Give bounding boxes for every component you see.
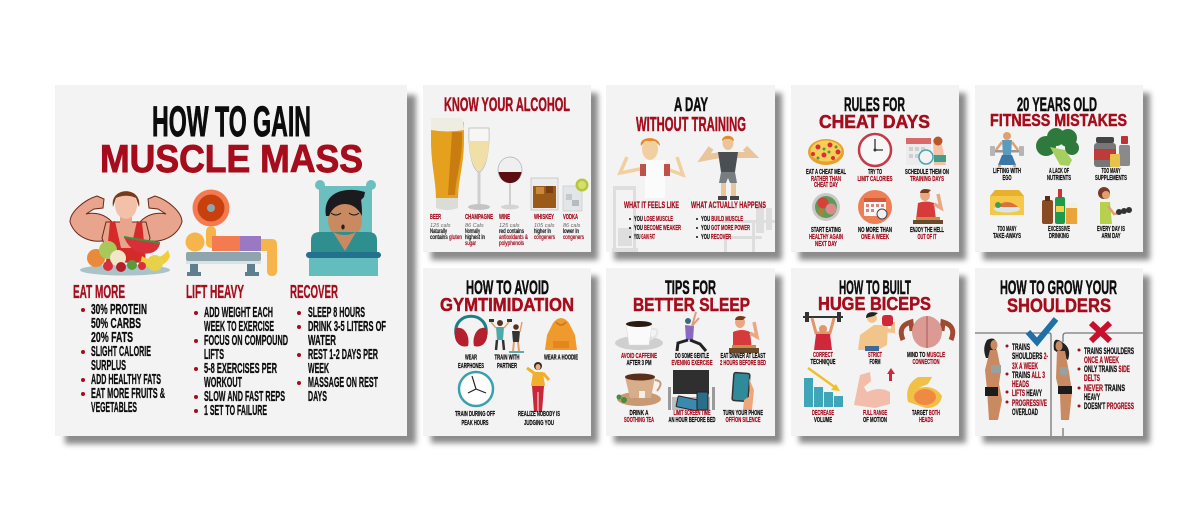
panel: how to gain muscle mass bbox=[55, 85, 407, 436]
column: what actually happens bbox=[691, 200, 766, 241]
list: bad habits: TRAINS SHOULDERS bbox=[1084, 346, 1134, 357]
labels: row two: PEAK HOURS bbox=[462, 420, 489, 427]
heading red: HUGE BICEPS bbox=[818, 293, 931, 314]
column: eat more: VEGETABLES bbox=[91, 400, 137, 416]
label: schedule them: TRAINING DAYS bbox=[910, 176, 944, 183]
label: try to limit calories bbox=[858, 169, 893, 183]
column: what actually happens: WHAT ACTUALLY HAPPENS bbox=[691, 200, 766, 211]
labels: alcohol types bbox=[430, 214, 585, 247]
panel: how to avoid gymtimidation bbox=[423, 268, 591, 436]
labels: alcohol types: Naturally bbox=[430, 228, 447, 235]
icon: brain with arms bbox=[901, 316, 953, 348]
list: good habits: OVERLOAD bbox=[1012, 407, 1038, 418]
icon: yoga bbox=[677, 312, 706, 351]
list: bad habits: HEAVY bbox=[1084, 392, 1100, 403]
column: what actually happens: YOU RECOVER bbox=[701, 232, 731, 241]
heading red: CHEAT DAYS bbox=[819, 111, 930, 132]
labels: row one bbox=[458, 354, 578, 370]
column: recover bbox=[290, 282, 386, 405]
column: lift heavy: LIFT HEAVY bbox=[186, 282, 244, 302]
heading: 20 YEARS OLD bbox=[1017, 94, 1097, 116]
column: recover: DRINK 3-5 LITERS OF bbox=[308, 319, 386, 335]
title: how to gain: HOW TO GAIN bbox=[152, 98, 311, 146]
column: what it feels like: YOU GAIN FAT bbox=[634, 232, 655, 241]
labels: row two: OFF/ON SILENCE bbox=[726, 417, 761, 424]
list: good habits: LIFTS HEAVY bbox=[1012, 388, 1042, 399]
panel: rules for cheat days bbox=[791, 85, 959, 252]
icon: decreasing volume chart bbox=[804, 368, 843, 407]
labels: alcohol types: congeners bbox=[563, 234, 585, 241]
column: recover: DAYS bbox=[308, 389, 327, 405]
labels: row one: TECHNIQUE bbox=[810, 359, 836, 366]
column: lift heavy: ADD WEIGHT EACH bbox=[204, 305, 273, 321]
column: recover: REST 1-2 DAYS PER bbox=[308, 347, 378, 363]
labels: alcohol types: 86 Cals bbox=[465, 223, 484, 229]
icon: wine bbox=[498, 157, 522, 210]
label: eat a cheat meal: RATHER THAN bbox=[811, 176, 841, 183]
labels: alcohol types: lower in bbox=[563, 228, 579, 235]
icon: champagne bbox=[468, 128, 490, 210]
label: enjoy the hell: ENJOY THE HELL bbox=[910, 227, 944, 234]
list: bad habits: ONCE A WEEK bbox=[1084, 355, 1119, 366]
labels: row one: MIND TO MUSCLE bbox=[907, 352, 945, 359]
label: try to limit calories: LIMIT CALORIES bbox=[858, 176, 893, 183]
labels: row two: FULL RANGE bbox=[863, 410, 887, 417]
column: eat more: SLIGHT CALORIE bbox=[91, 344, 151, 360]
icon: overhead lifter bbox=[803, 312, 843, 350]
icon: woman with dumbbells bbox=[1098, 187, 1132, 224]
label: no more than: NO MORE THAN bbox=[858, 227, 892, 234]
title: muscle mass: MUSCLE MASS bbox=[100, 138, 363, 181]
list: good habits: TRAINS bbox=[1012, 342, 1030, 353]
column: eat more: ADD HEALTHY FATS bbox=[91, 372, 161, 388]
labels: alcohol types: contains gluten bbox=[430, 234, 462, 241]
labels: row one: EARPHONES bbox=[458, 363, 484, 370]
column: lift heavy: WEEK TO EXERCISE bbox=[204, 319, 274, 335]
labels: row two: VOLUME bbox=[814, 417, 832, 424]
column: lift heavy: SLOW AND FAST REPS bbox=[204, 389, 285, 405]
list: good habits bbox=[1006, 342, 1048, 418]
icon: vodka bbox=[563, 178, 588, 211]
labels: row one: LIFTING WITH bbox=[993, 168, 1021, 175]
label: enjoy the hell bbox=[910, 227, 944, 241]
column: eat more: 30% PROTEIN bbox=[91, 302, 147, 318]
column: lift heavy: LIFTS bbox=[204, 347, 224, 363]
list: bad habits: DOESN'T PROGRESS bbox=[1084, 401, 1134, 412]
label: start eating: NEXT DAY bbox=[815, 241, 837, 248]
labels: row one: EAT DINNER AT LEAST bbox=[720, 353, 766, 360]
labels: row two: TOO MANY bbox=[998, 226, 1017, 233]
column: what it feels like bbox=[624, 200, 681, 241]
labels: row one: CORRECT bbox=[813, 352, 833, 359]
labels: row one: FORM bbox=[870, 359, 881, 366]
heading: RULES FOR bbox=[844, 94, 905, 116]
column: lift heavy bbox=[186, 282, 288, 419]
icon: muscular man bbox=[704, 136, 752, 200]
icon: tea cup bbox=[616, 374, 661, 406]
labels: alcohol types: red contains bbox=[499, 228, 525, 235]
panel: how to grow your shoulders bbox=[975, 268, 1143, 436]
labels: alcohol types: antioxidants & bbox=[499, 234, 528, 241]
labels: row two: EXCESSIVE bbox=[1048, 226, 1070, 233]
labels: alcohol types: VODKA bbox=[563, 214, 578, 221]
label: eat a cheat meal: CHEAT DAY bbox=[814, 182, 838, 189]
list: bad habits bbox=[1078, 346, 1134, 412]
icon: skinny man bbox=[620, 138, 683, 198]
labels: row two: AN HOUR BEFORE BED bbox=[668, 417, 716, 424]
labels: row two: OF MOTION bbox=[863, 417, 887, 424]
labels: alcohol types: 86 cals bbox=[563, 223, 581, 229]
icon: take-away box bbox=[990, 190, 1024, 215]
labels: row one: SUPPLEMENTS bbox=[1095, 175, 1127, 182]
icon: coffee cup bbox=[615, 321, 663, 350]
column: recover: WEEK bbox=[308, 361, 329, 377]
column: eat more: SURPLUS bbox=[91, 358, 126, 374]
icon: cross mark bbox=[1091, 323, 1110, 341]
labels: row one: CONNECTION bbox=[912, 359, 940, 366]
icon: muscular man bbox=[858, 312, 893, 351]
labels: row two: DECREASE bbox=[812, 410, 834, 417]
list: bad habits: DELTS bbox=[1084, 373, 1100, 384]
panel: 20 years old fitness mistakes bbox=[975, 85, 1143, 252]
icon: lifter bbox=[990, 132, 1024, 167]
labels: alcohol types: 125 cals bbox=[430, 223, 451, 229]
labels: row two: HEADS bbox=[919, 417, 933, 424]
icon: orange calendar bbox=[858, 190, 892, 224]
icon: hoodie bbox=[545, 318, 577, 350]
labels: row two bbox=[993, 226, 1125, 240]
labels: row one: TOO MANY bbox=[1102, 168, 1121, 175]
labels: row one: DO SOME GENTLE bbox=[675, 353, 709, 360]
icon: wall clock bbox=[459, 372, 493, 406]
column: recover: MASSAGE ON REST bbox=[308, 375, 378, 391]
label: start eating: START EATING bbox=[811, 227, 841, 234]
labels: alcohol types: BEER bbox=[430, 214, 441, 221]
labels: row two: LIMIT SCREEN TIME bbox=[674, 410, 711, 417]
labels: alcohol types: highest in bbox=[465, 234, 485, 241]
column: what it feels like: YOU LOSE MUSCLE bbox=[634, 214, 673, 223]
heading: TIPS FOR bbox=[665, 277, 716, 299]
panel: know your alcohol bbox=[423, 85, 591, 252]
labels: row two: TURN YOUR PHONE bbox=[723, 410, 763, 417]
labels: row one: PARTNER bbox=[497, 363, 517, 370]
icon: phone in hand bbox=[732, 372, 754, 410]
list: good habits: 3X A WEEK bbox=[1012, 361, 1038, 372]
column: what actually happens: YOU GOT MORE POWER bbox=[701, 223, 750, 232]
labels: row two: TAKE-AWAYS bbox=[993, 233, 1021, 240]
labels: row two: REALIZE NOBODY IS bbox=[518, 411, 560, 418]
labels: row two: EVERY DAY IS bbox=[1097, 226, 1125, 233]
column: what actually happens: YOU BUILD MUSCLE bbox=[701, 214, 743, 223]
labels: row one: TRAIN WITH bbox=[494, 354, 520, 362]
icon: bench press bbox=[186, 190, 277, 276]
heading: HOW TO AVOID bbox=[466, 277, 549, 299]
icon: muscular man with fruit plate bbox=[70, 191, 182, 276]
labels: row one: 2 HOURS BEFORE BED bbox=[720, 360, 766, 367]
figure: woman with good shoulders bbox=[984, 338, 1002, 420]
column: eat more bbox=[73, 282, 165, 416]
labels: row one bbox=[993, 168, 1127, 182]
column: lift heavy: FOCUS ON COMPOUND bbox=[204, 333, 288, 349]
column: what it feels like: WHAT IT FEELS LIKE bbox=[624, 200, 679, 211]
panel: tips for better sleep bbox=[606, 268, 775, 436]
heading red: WITHOUT TRAINING bbox=[636, 113, 746, 136]
label: schedule them: SCHEDULE THEM ON bbox=[905, 169, 949, 176]
labels: row two bbox=[812, 410, 940, 424]
icon: check mark bbox=[1028, 319, 1056, 342]
list: good habits: PROGRESSIVE bbox=[1012, 398, 1047, 409]
labels: row one: NUTRIENTS bbox=[1047, 175, 1071, 182]
labels: alcohol types: Normally bbox=[465, 228, 480, 235]
column: eat more: 20% FATS bbox=[91, 330, 133, 346]
labels: row two bbox=[624, 410, 763, 424]
column: recover: WATER bbox=[308, 333, 336, 349]
panel: a day without training bbox=[606, 85, 775, 252]
labels: row two: TRAIN DURING OFF bbox=[455, 411, 495, 418]
icon: salad bbox=[812, 193, 840, 221]
labels: row one: STRICT bbox=[868, 352, 882, 359]
list: bad habits: NEVER TRAINS bbox=[1084, 383, 1125, 394]
label: no more than bbox=[858, 227, 892, 241]
heading red: GYMTIMIDATION bbox=[440, 294, 574, 315]
list: bad habits: ONLY TRAINS SIDE bbox=[1084, 364, 1130, 375]
icon: pizza bbox=[808, 139, 844, 165]
label: no more than: ONE A WEEK bbox=[861, 234, 889, 241]
label: enjoy the hell: OUT OF IT bbox=[918, 234, 937, 241]
icon: beer bbox=[431, 118, 464, 210]
list: good habits: SHOULDERS 2- bbox=[1012, 351, 1048, 362]
label: eat a cheat meal bbox=[806, 169, 846, 189]
icon: headphones bbox=[455, 316, 487, 347]
icon: woman shrugging bbox=[527, 362, 549, 413]
labels: row one: AFTER 3 PM bbox=[626, 360, 652, 367]
icon: supplements bbox=[1094, 136, 1130, 167]
faded gym equipment bbox=[612, 186, 775, 252]
labels: row two: TARGET BOTH bbox=[912, 410, 940, 417]
labels: row one: A LACK OF bbox=[1049, 168, 1069, 175]
labels: row two: SOOTHING TEA bbox=[624, 417, 654, 424]
icon: sleeping person bbox=[306, 180, 381, 276]
heading red: SHOULDERS bbox=[1007, 296, 1111, 317]
labels: row one bbox=[621, 353, 766, 367]
icon: calendar and woman bbox=[906, 136, 946, 165]
labels: row two: DRINK A bbox=[630, 410, 648, 417]
icon: whiskey bbox=[531, 178, 558, 210]
label: try to limit calories: TRY TO bbox=[868, 169, 882, 176]
heading red: FITNESS MISTAKES bbox=[990, 110, 1127, 130]
icon: man eating bbox=[913, 189, 943, 224]
labels: alcohol types: sugar bbox=[465, 240, 477, 247]
labels: row one bbox=[810, 352, 945, 366]
list: good habits: HEADS bbox=[1012, 379, 1029, 390]
column: eat more: EAT MORE bbox=[73, 282, 125, 302]
labels: row one: AVOID CAFFEINE bbox=[621, 353, 657, 360]
labels: row one: EVENING EXERCISE bbox=[672, 360, 713, 367]
icon: flexed bicep bbox=[907, 377, 942, 408]
column: recover: RECOVER bbox=[290, 282, 338, 302]
label: eat a cheat meal: EAT A CHEAT MEAL bbox=[806, 169, 846, 176]
labels: alcohol types: higher in bbox=[534, 228, 551, 235]
labels: alcohol types: polyphenols bbox=[499, 240, 525, 247]
labels: alcohol types: congeners bbox=[534, 234, 556, 241]
column: eat more: 50% CARBS bbox=[91, 316, 141, 332]
labels: row one: EGO bbox=[1002, 175, 1012, 182]
label: start eating: HEALTHY AGAIN bbox=[809, 234, 843, 241]
labels: alcohol types: WINE bbox=[499, 214, 510, 221]
labels: row one: WEAR A HOODIE bbox=[544, 354, 578, 362]
icon: man eating dinner bbox=[729, 316, 759, 353]
labels: row two: DRINKING bbox=[1049, 233, 1069, 240]
heading: HOW TO BUILT bbox=[839, 277, 911, 299]
icon: tv and devices bbox=[668, 370, 715, 411]
column: lift heavy: 5-8 EXERCISES PER bbox=[204, 361, 277, 377]
column: eat more: EAT MORE FRUITS & bbox=[91, 386, 165, 402]
labels: row one: WEAR bbox=[465, 354, 477, 362]
labels: alcohol types: WHISKEY bbox=[534, 214, 554, 221]
heading: A DAY bbox=[674, 94, 708, 116]
icon: broccoli bbox=[1036, 128, 1079, 166]
column: lift heavy: WORKOUT bbox=[204, 375, 242, 391]
labels: row two: JUDGING YOU bbox=[524, 420, 554, 427]
icon: training partners bbox=[489, 319, 524, 353]
label: schedule them bbox=[905, 169, 949, 183]
labels: row two bbox=[455, 411, 560, 427]
labels: alcohol types: CHAMPAGNE bbox=[465, 214, 493, 221]
label: start eating bbox=[809, 227, 843, 248]
labels: alcohol types: 105 cals bbox=[534, 223, 555, 229]
column: lift heavy: 1 SET TO FAILURE bbox=[204, 403, 267, 419]
heading red: BETTER SLEEP bbox=[633, 294, 750, 315]
panel: how to build huge biceps bbox=[791, 268, 959, 436]
labels: alcohol types: 125 cals bbox=[499, 223, 520, 229]
icon: arm full range of motion bbox=[854, 368, 895, 408]
icon: bottles bbox=[1042, 189, 1077, 224]
list: good habits: TRAINS ALL 3 bbox=[1012, 370, 1045, 381]
column: recover: SLEEP 8 HOURS bbox=[308, 305, 365, 321]
column: what it feels like: YOU BECOME WEAKER bbox=[634, 223, 681, 232]
icon: clock bbox=[859, 134, 891, 166]
labels: row two: ARM DAY bbox=[1102, 233, 1121, 240]
heading: KNOW YOUR ALCOHOL bbox=[444, 94, 570, 116]
figure: woman with poor shoulders bbox=[1054, 340, 1072, 420]
